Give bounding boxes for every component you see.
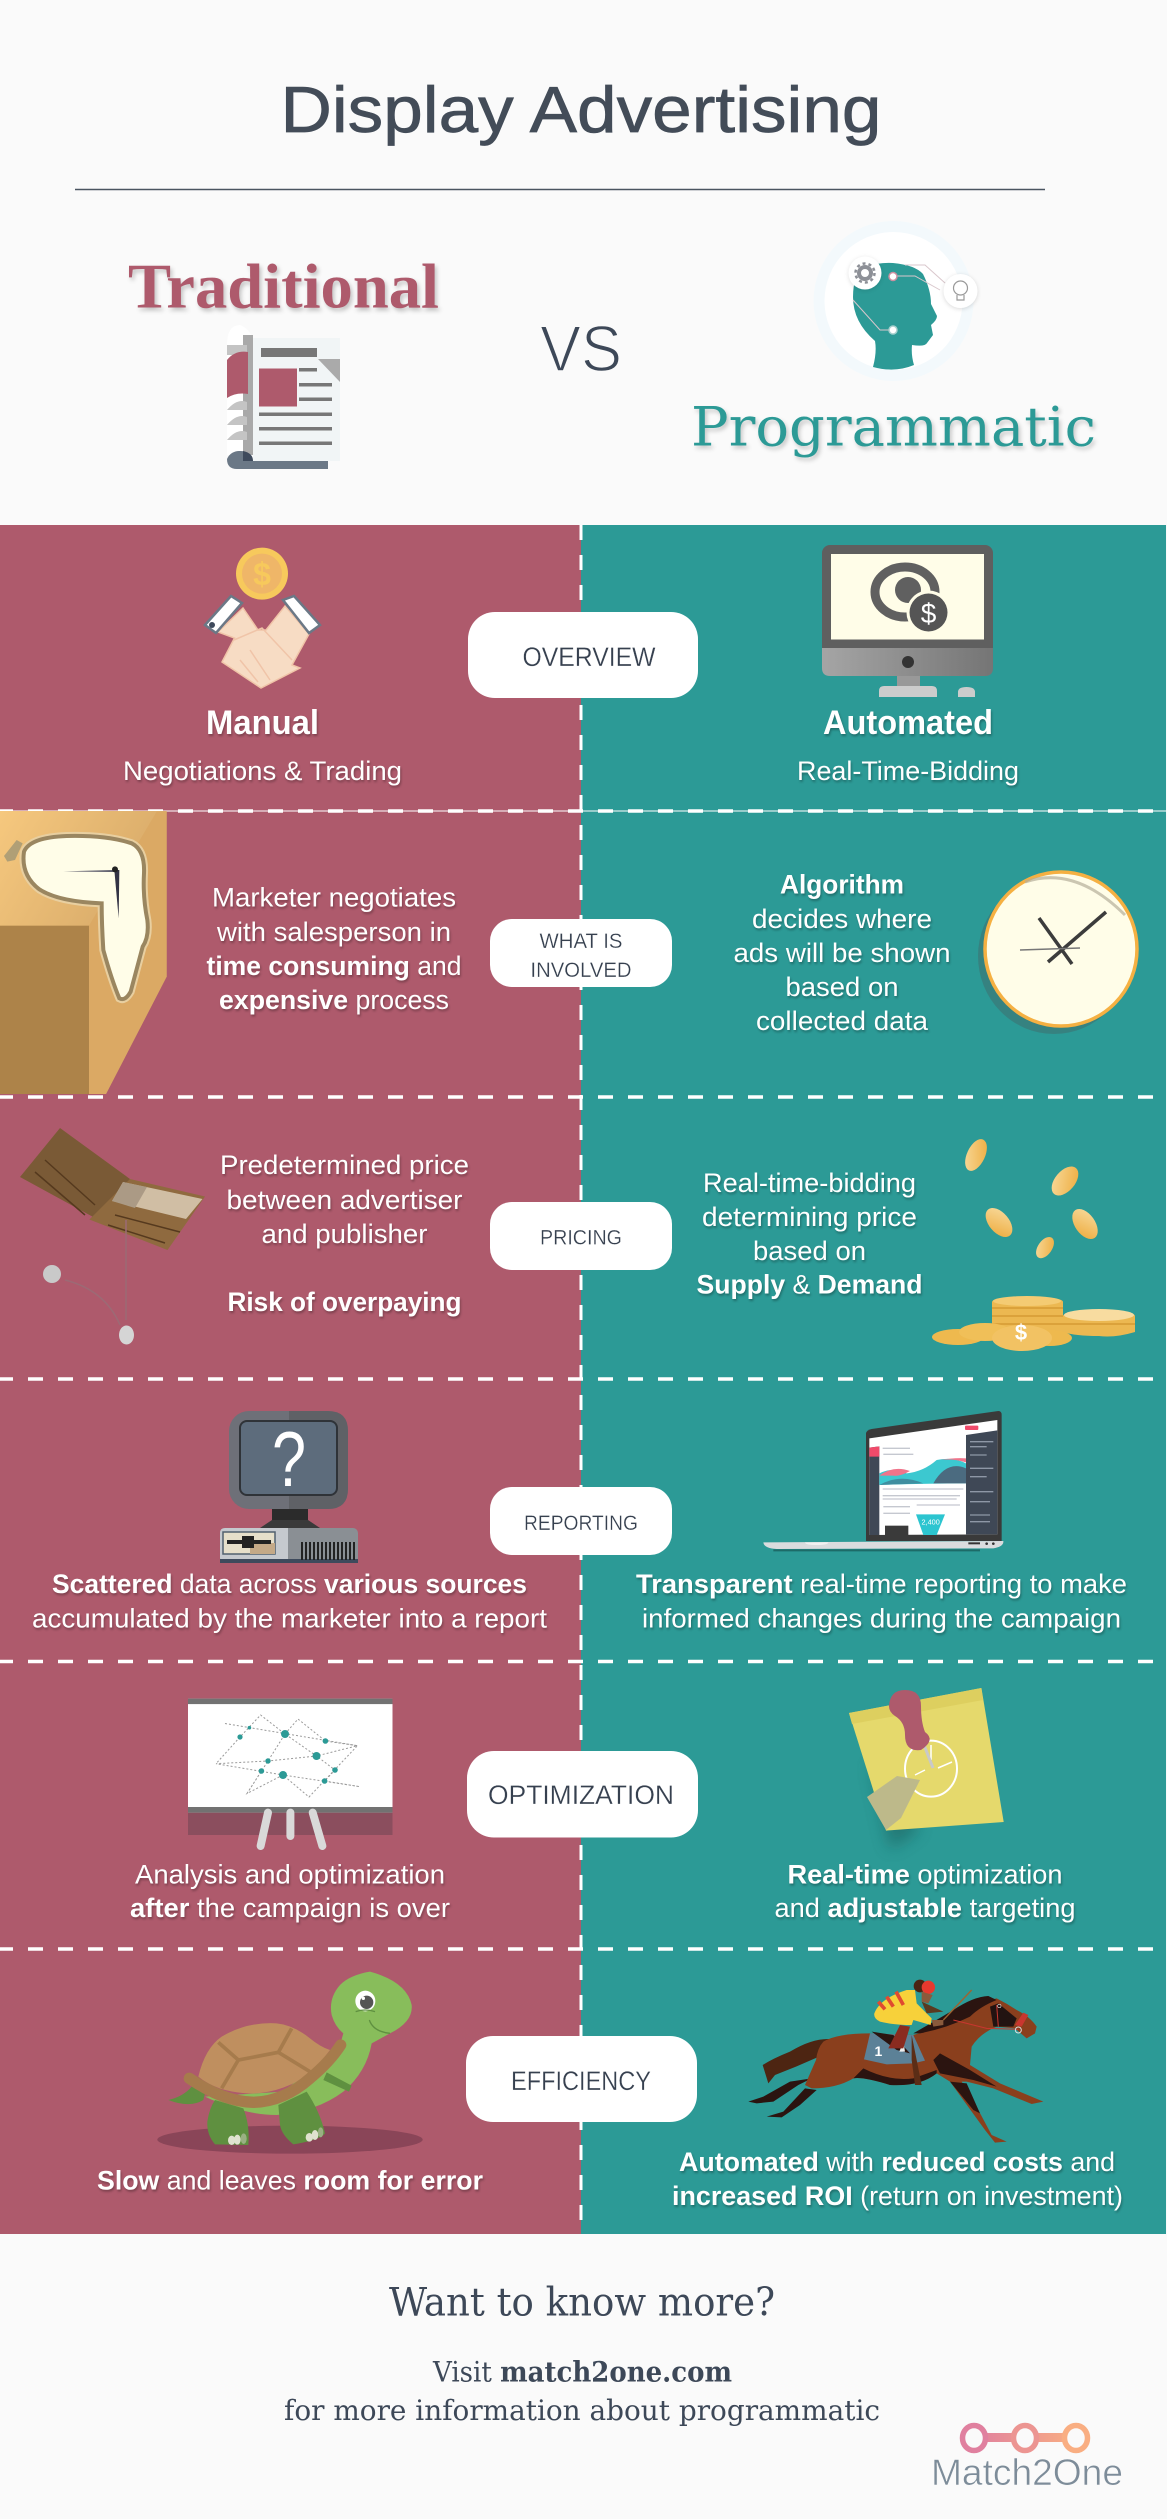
footer call to action [284,2280,880,2427]
text: efficiency, programmatic: increased ROI (return on investment) [672,2181,1123,2211]
pill: what is involved [490,919,672,987]
text: optimization, programmatic [774,1860,1076,1923]
text: Manual: Manual [206,704,319,742]
footer call to action: Visit match2one.com [432,2356,732,2388]
icon: old computer with question mark [220,1411,358,1563]
icon: turtle [157,1972,423,2154]
text: Automated [797,704,1019,786]
text: what is involved, traditional: with salesperson in [216,917,451,947]
text: what is involved, programmatic: based on [786,972,898,1002]
footer call to action: for more information about programmatic [284,2394,880,2427]
text: optimization, programmatic: and adjustable targeting [774,1893,1076,1923]
text: pricing, programmatic [696,1168,922,1300]
text: pricing, traditional: between advertiser [226,1185,462,1215]
text: what is involved, traditional: expensive process [219,985,449,1015]
pill: what is involved: INVOLVED [530,959,632,982]
icon: melting clock on table [0,811,167,1094]
logo: Match2One [931,2426,1123,2493]
logo: Match2One: Match2One [931,2452,1123,2493]
text: what is involved, programmatic: ads will be shown [734,938,950,968]
text: reporting, programmatic: Transparent real-time reporting to make [636,1569,1127,1599]
text: efficiency, programmatic [672,2147,1123,2211]
text: reporting, traditional: Scattered data across various sources [52,1569,527,1599]
pill: pricing: PRICING [540,1226,622,1250]
icon: flying coins and stacks: $ [1015,1320,1027,1345]
text: efficiency, programmatic: Automated with reduced costs and [679,2147,1115,2177]
icon: racing horse with jockey [748,1980,1043,2143]
pill: reporting: REPORTING [524,1512,638,1535]
pill: reporting [490,1487,672,1555]
heading: Programmatic: Programmatic [691,396,1096,458]
title: Display Advertising [280,73,882,146]
pill: what is involved: WHAT IS [540,930,622,953]
text: pricing, programmatic: Real-time-bidding [703,1168,916,1198]
text: what is involved, programmatic: collected data [756,1006,929,1036]
text: optimization, traditional: after the campaign is over [130,1893,450,1923]
panel: traditional column background [0,525,581,2234]
pill: overview: OVERVIEW [522,642,656,672]
icon: head with gears [814,221,978,381]
text: what is involved, programmatic: decides where [752,904,932,934]
text: Automated: Automated [823,704,993,742]
text: efficiency, traditional: Slow and leaves room for error [97,2166,483,2196]
text: pricing, programmatic: determining price [702,1202,917,1232]
text: reporting, traditional: accumulated by the marketer into a report [32,1604,547,1634]
pill: efficiency: EFFICIENCY [511,2066,651,2096]
text: reporting, programmatic [636,1569,1127,1634]
pill: overview [468,612,698,698]
text: what is involved, traditional: Marketer negotiates [212,882,456,912]
text: optimization, programmatic: Real-time optimization [788,1860,1062,1890]
text: pricing, traditional [220,1150,469,1317]
text: what is involved, programmatic [734,870,950,1036]
icon: wall clock [978,872,1137,1034]
pill: efficiency [466,2036,697,2122]
text: optimization, traditional: Analysis and optimization [135,1860,445,1890]
icon: handshake with coin [205,548,320,688]
text: Manual [123,704,402,786]
text: pricing, traditional: and publisher [262,1219,428,1249]
heading: Traditional: Traditional [128,250,439,322]
footer call to action: Want to know more? [389,2280,775,2326]
text: Automated: Real-Time-Bidding [797,756,1019,786]
pill: optimization: OPTIMIZATION [488,1780,674,1810]
icon: presentation board with network [188,1699,392,1846]
VS label: VS [540,312,622,385]
text: pricing, traditional: Risk of overpaying [228,1287,462,1317]
icon: newspaper [227,325,340,469]
text: optimization, traditional [130,1860,450,1923]
pill: optimization [467,1751,698,1838]
text: what is involved, programmatic: Algorithm [780,870,904,900]
icon: monitor with eye [822,545,993,697]
text: reporting, traditional [32,1569,547,1634]
text: pricing, programmatic: based on [753,1236,866,1266]
icon: handshake with coin: $ [253,556,271,592]
panel: programmatic column background [581,525,1166,2234]
text: pricing, traditional: Predetermined price [220,1150,469,1180]
icon: racing horse with jockey: 1 [874,2043,882,2059]
icon: laptop with dashboard: 2,400 [921,1517,940,1526]
icon: old computer with question mark: ? [272,1415,306,1503]
icon: monitor with eye: $ [921,598,937,629]
text: pricing, programmatic: Supply & Demand [696,1270,922,1300]
text: Manual: Negotiations & Trading [123,756,402,786]
icon: sticky note with pin [849,1688,1004,1850]
text: what is involved, traditional: time consuming and [206,951,462,981]
icon: open wallet with falling coins [20,1128,205,1344]
text: reporting, programmatic: informed changes during the campaign [642,1604,1121,1634]
icon: laptop with dashboard [763,1411,1003,1550]
icon: flying coins and stacks [932,1136,1135,1351]
pill: pricing [490,1202,672,1270]
text: what is involved, traditional [206,882,462,1015]
